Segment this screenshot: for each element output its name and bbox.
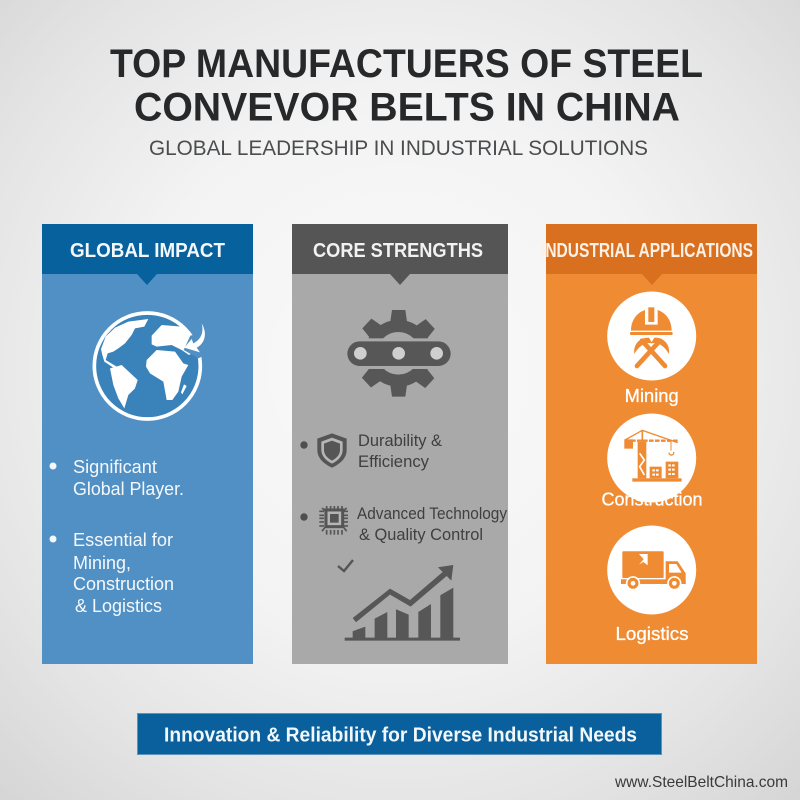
strength: durability and efficiency: Durability & bbox=[358, 432, 442, 450]
application: mining: Mining bbox=[625, 386, 679, 406]
website url: www.SteelBeltChina.com bbox=[614, 774, 788, 791]
title: TOP MANUFACTUERS OF STEEL bbox=[110, 42, 703, 86]
header: core strengths bbox=[292, 224, 508, 285]
header: industrial applications bbox=[541, 224, 757, 285]
icon: globe with arrow bbox=[94, 313, 205, 419]
panel: industrial applications bbox=[541, 224, 757, 664]
list: global impact: Global Player. bbox=[73, 479, 184, 499]
header: global impact: GLOBAL IMPACT bbox=[70, 240, 225, 262]
strength: advanced technology and quality control bbox=[300, 505, 508, 544]
application: construction bbox=[602, 414, 702, 510]
application: construction: Construction bbox=[602, 490, 702, 510]
icon: check mark bbox=[338, 560, 353, 571]
banner: innovation and reliability: Innovation & Reliability for Diverse Industrial Needs bbox=[164, 724, 637, 746]
list: global impact: Mining, bbox=[73, 553, 131, 573]
icon: gear and belt bbox=[340, 310, 457, 397]
strength: durability and efficiency: Efficiency bbox=[358, 453, 430, 471]
header: core strengths: CORE STRENGTHS bbox=[313, 240, 483, 262]
list: global impact bbox=[50, 457, 184, 616]
list: global impact: & Logistics bbox=[75, 596, 162, 616]
list: global impact: Essential for bbox=[73, 530, 173, 550]
icon: rising bar chart bbox=[345, 565, 460, 641]
header: global impact bbox=[42, 224, 253, 285]
banner: innovation and reliability bbox=[138, 714, 662, 754]
list: global impact: Significant bbox=[73, 457, 157, 477]
panel: global impact bbox=[42, 224, 253, 664]
application: logistics: Logistics bbox=[616, 624, 688, 644]
strength: advanced technology and quality control: Advanced Technology bbox=[357, 505, 508, 523]
subtitle: GLOBAL LEADERSHIP IN INDUSTRIAL SOLUTIONS bbox=[149, 136, 648, 160]
application: mining bbox=[607, 292, 696, 406]
strength: advanced technology and quality control: & Quality Control bbox=[359, 526, 483, 544]
title bbox=[110, 42, 703, 130]
application: logistics bbox=[607, 526, 696, 644]
strength: durability and efficiency bbox=[300, 432, 442, 471]
list: global impact: Construction bbox=[73, 574, 174, 594]
title: CONVEVOR BELTS IN CHINA bbox=[134, 86, 680, 130]
panel: core strengths bbox=[292, 224, 508, 664]
